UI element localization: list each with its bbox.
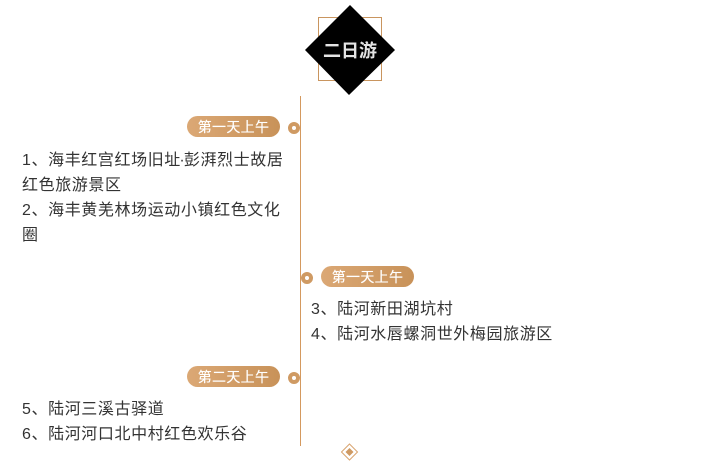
label pill: 第二天上午 xyxy=(198,369,269,385)
list text xyxy=(22,400,247,443)
section 3: second morning xyxy=(22,366,300,443)
label pill xyxy=(187,366,280,387)
list text: 红色旅游景区 xyxy=(22,177,122,194)
list text: 3、陆河新田湖坑村 xyxy=(311,301,453,318)
timeline dot xyxy=(301,272,313,284)
label pill: 第一天上午 xyxy=(332,269,403,285)
list text: 6、陆河河口北中村红色欢乐谷 xyxy=(22,426,247,443)
list text: 4、陆河水唇螺洞世外梅园旅游区 xyxy=(311,326,553,343)
section 1: first morning xyxy=(22,116,300,244)
list text: 5、陆河三溪古驿道 xyxy=(22,401,164,418)
end marker diamond icon xyxy=(341,443,358,461)
title text: 二日游 xyxy=(323,41,377,61)
list text: 2、海丰黄羌林场运动小镇红色文化 xyxy=(22,202,280,219)
list text: 1、海丰红宫红场旧址·彭湃烈士故居 xyxy=(22,152,283,169)
list text xyxy=(311,300,553,343)
label pill xyxy=(187,116,280,137)
label pill xyxy=(321,266,414,287)
list text xyxy=(22,151,283,244)
black diamond xyxy=(305,5,395,95)
title badge: outlined square with black diamond xyxy=(305,5,395,95)
timeline vertical line xyxy=(300,96,301,446)
section 2: right side morning xyxy=(301,266,553,343)
timeline dot xyxy=(288,372,300,384)
timeline dot xyxy=(288,122,300,134)
label pill: 第一天上午 xyxy=(198,119,269,135)
outlined square xyxy=(318,17,382,81)
list text: 圈 xyxy=(22,227,39,244)
